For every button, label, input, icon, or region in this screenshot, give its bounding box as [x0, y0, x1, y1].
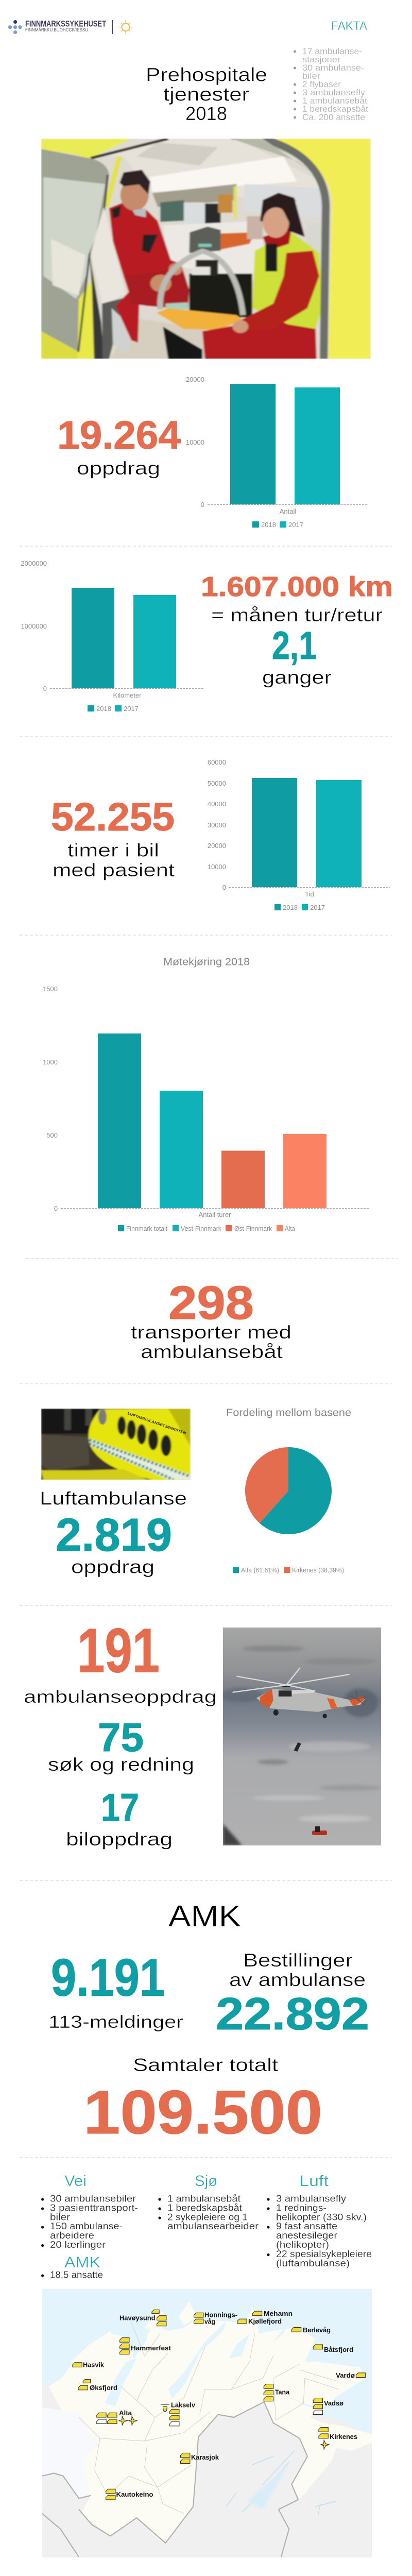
stat: 1.607.000 km: = månen tur/retur — [211, 604, 383, 625]
panel: AMK staff: 18,5 ansatte — [50, 2270, 103, 2280]
panel: Luft: 1 rednings- — [276, 2203, 327, 2213]
bar chart: møtekjøring: Antall turer — [199, 1211, 231, 1218]
pie chart: fordeling — [233, 1447, 344, 1574]
stat: 298 transporter: 298 — [168, 1277, 254, 1329]
stat: 191 ambulanseoppdrag: ambulanseoppdrag — [24, 1687, 217, 1707]
panel: Vei: 30 ambulansebiler — [50, 2194, 136, 2204]
bar chart: møtekjøring: Alta — [285, 1225, 296, 1232]
logo: FINNMARKSSYKEHUSET — [25, 19, 106, 28]
bar chart: tid: 60000 — [208, 758, 226, 766]
heading: Fordeling mellom basene: Fordeling mellom basene — [226, 1408, 351, 1419]
logo: FINNMÁRKKU BUOHCCIVIESSU — [25, 27, 88, 33]
map labels: Vadsø — [324, 2399, 344, 2407]
panel: Vei: arbeidere — [50, 2230, 94, 2241]
panel: Luft: (helikopter) — [276, 2240, 329, 2250]
stat: samtaler totalt: 109.500 — [83, 2078, 322, 2147]
map labels: Honnings- — [204, 2311, 237, 2318]
panel: Luft: (luftambulanse) — [276, 2258, 350, 2268]
map labels: Hammerfest — [131, 2344, 171, 2352]
fact list: 30 ambulanse- — [302, 63, 364, 73]
bar chart: oppdrag: 10000 — [186, 438, 204, 446]
stat: bestillinger av ambulanse: av ambulanse — [229, 1969, 366, 1990]
bar chart: kilometer: 1000000 — [21, 622, 47, 630]
stat: 52.255 timer — [51, 795, 175, 880]
bar chart: tid: 2017 — [310, 904, 325, 911]
stat: 19.264 oppdrag — [57, 413, 181, 479]
stat: 17 biloppdrag: biloppdrag — [66, 1828, 173, 1850]
photo: paramedics in ambulance — [41, 139, 371, 360]
stat: 1.607.000 km — [201, 571, 393, 688]
fact list — [294, 46, 368, 122]
bar chart: møtekjøring: 0 — [54, 1205, 58, 1212]
fact list: 3 ambulansefly — [302, 88, 366, 97]
panel: Sjø: 2 sykepleiere og 1 — [167, 2212, 248, 2222]
stat: 113-meldinger: 113-meldinger — [48, 2012, 183, 2032]
map labels: Øksfjord — [90, 2384, 117, 2392]
map: stations in Finnmark — [42, 2289, 372, 2557]
heading: AMK: AMK — [168, 1900, 241, 1933]
stat: 298 transporter: ambulansebåt — [141, 1341, 283, 1362]
bar chart: tid: 30000 — [208, 821, 226, 829]
heading: Møtekjøring 2018: Møtekjøring 2018 — [163, 956, 250, 968]
fact list: 1 ambulansebåt — [302, 96, 367, 106]
bar chart: møtekjøring: 1000 — [43, 1058, 58, 1066]
panel: Luft: anestesileger — [276, 2230, 337, 2241]
panel: Vei: 3 pasienttransport- — [50, 2203, 138, 2213]
panel: Sjø — [158, 2173, 259, 2231]
stat: 52.255 timer: timer i bil — [67, 840, 159, 860]
bar chart: tid: 0 — [222, 884, 226, 891]
fact list: 17 ambulanse- — [302, 46, 362, 56]
panel: Luft: 22 spesialsykepleiere — [276, 2249, 372, 2259]
panel: Vei: 20 lærlinger — [50, 2240, 106, 2250]
title: tjenester — [163, 83, 249, 105]
photo: ambulance plane — [41, 1409, 191, 1481]
stat: 75 søk og redning: 75 — [98, 1715, 144, 1760]
photo: ambulance plane: LUFTAMBULANSETJENESTEN — [127, 1412, 186, 1435]
fact list: 2 flybaser — [302, 79, 341, 89]
map labels: Hasvik — [83, 2361, 105, 2369]
fact list: Ca. 200 ansatte — [302, 112, 365, 122]
panel: AMK staff — [41, 2254, 103, 2280]
panel: Luft: Luft — [299, 2173, 329, 2190]
stat: bestillinger av ambulanse — [216, 1950, 369, 2039]
stat: 1.607.000 km: ganger — [262, 667, 332, 688]
title — [146, 64, 267, 124]
bar chart: tid — [208, 758, 390, 911]
bar chart: tid: 50000 — [208, 779, 226, 787]
stat: 191 ambulanseoppdrag — [24, 1616, 217, 1707]
pie chart: fordeling: Kirkenes (38.39%) — [292, 1566, 344, 1574]
map labels: Mehamn — [264, 2310, 293, 2317]
logo — [8, 19, 132, 34]
bar chart: tid: 40000 — [208, 800, 226, 808]
stat: samtaler totalt: Samtaler totalt — [133, 2055, 278, 2075]
panel: Luft: 9 fast ansatte — [276, 2221, 337, 2231]
stat: 17 biloppdrag: 17 — [101, 1786, 139, 1829]
stat: 113-meldinger: 9.191 — [51, 1948, 165, 2007]
map labels: Tana — [275, 2388, 290, 2396]
map labels: Kautokeino — [116, 2490, 153, 2498]
stat: 17 biloppdrag — [66, 1786, 173, 1850]
map labels: Kirkenes — [330, 2433, 357, 2441]
stat: 19.264 oppdrag: 19.264 — [57, 413, 181, 457]
bar chart: møtekjøring: 1500 — [43, 985, 58, 993]
bar chart: tid: 2018 — [283, 904, 298, 911]
bar chart: møtekjøring: Vest-Finnmark — [181, 1225, 221, 1232]
panel: Sjø: 1 beredskapsbåt — [167, 2203, 242, 2213]
panel: Vei: biler — [50, 2212, 70, 2222]
panel: Luft — [267, 2173, 372, 2268]
stat: luftambulanse — [40, 1488, 187, 1578]
pie chart: fordeling: Alta (61.61%) — [241, 1566, 279, 1574]
bar chart: oppdrag: 2017 — [288, 521, 303, 529]
stat: 75 søk og redning — [48, 1715, 194, 1775]
map labels: Berlevåg — [303, 2326, 331, 2334]
bar chart: møtekjøring: 500 — [46, 1131, 58, 1139]
bar chart: kilometer: 2000000 — [21, 560, 47, 567]
title: 2018 — [185, 103, 227, 124]
bar chart: tid: Tid — [305, 890, 314, 898]
panel: Luft: 3 ambulansefly — [276, 2194, 346, 2204]
panel: Sjø: ambulansearbeider — [167, 2221, 259, 2231]
bar chart: møtekjøring: Øst-Finnmark — [234, 1225, 272, 1232]
stat: 298 transporter: transporter med — [131, 1321, 291, 1343]
panel: Sjø: Sjø — [195, 2173, 217, 2190]
bar chart: oppdrag: 20000 — [186, 376, 204, 383]
title: Prehospitale — [146, 64, 267, 86]
bar chart: oppdrag — [186, 376, 368, 529]
map labels: Karasjok — [191, 2453, 219, 2461]
fact list: biler — [302, 71, 320, 81]
heading: FAKTA: FAKTA — [331, 19, 367, 33]
bar chart: kilometer: 0 — [43, 685, 47, 692]
stat: 191 ambulanseoppdrag: 191 — [77, 1616, 160, 1686]
map labels: Kjøllefjord — [248, 2317, 282, 2325]
stat: luftambulanse: 2.819 — [56, 1510, 172, 1561]
stat: 52.255 timer: med pasient — [53, 859, 175, 880]
bar chart: oppdrag: 0 — [201, 501, 204, 509]
map labels: Havøysund — [119, 2314, 156, 2321]
stat: 298 transporter — [131, 1277, 291, 1362]
map labels: Lakselv — [171, 2401, 196, 2409]
fact list: stasjoner — [302, 55, 340, 64]
stat: 75 søk og redning: søk og redning — [48, 1754, 194, 1775]
bar chart: kilometer: 2018 — [96, 705, 111, 713]
map labels: våg — [204, 2317, 215, 2325]
map labels: Alta — [119, 2409, 132, 2417]
panel: AMK staff: AMK — [64, 2254, 100, 2271]
stat: 113-meldinger — [48, 1948, 183, 2032]
map labels: Båtsfjord — [324, 2346, 353, 2353]
panel: Vei: 150 ambulanse- — [50, 2221, 123, 2231]
bar chart: kilometer: Kilometer — [113, 691, 142, 699]
map labels — [83, 2310, 357, 2498]
bar chart: møtekjøring — [43, 985, 369, 1232]
panel: Vei: Vei — [64, 2173, 87, 2190]
panel: Vei — [41, 2173, 138, 2250]
stat: 19.264 oppdrag: oppdrag — [77, 457, 160, 479]
bar chart: kilometer: 2017 — [124, 705, 139, 713]
panel: Luft: helikopter (330 skv.) — [276, 2212, 367, 2222]
stat: bestillinger av ambulanse: 22.892 — [216, 1988, 369, 2039]
stat: 1.607.000 km: 1.607.000 km — [201, 571, 393, 602]
bar chart: tid: 20000 — [208, 842, 226, 850]
stat: 1.607.000 km: 2,1 — [272, 624, 317, 668]
stat: bestillinger av ambulanse: Bestillinger — [243, 1950, 353, 1971]
stat: luftambulanse: Luftambulanse — [40, 1488, 187, 1509]
bar chart: kilometer — [21, 560, 203, 713]
bar chart: tid: 10000 — [208, 863, 226, 871]
photo: rescue helicopter — [221, 1628, 381, 1845]
fact list: 1 beredskapsbåt — [302, 104, 368, 114]
bar chart: oppdrag: Antall — [280, 507, 296, 515]
panel: Sjø: 1 ambulansebåt — [167, 2194, 241, 2204]
stat: luftambulanse: oppdrag — [71, 1556, 154, 1578]
stat: 52.255 timer: 52.255 — [51, 795, 175, 839]
map labels: Vardø — [336, 2371, 355, 2379]
bar chart: møtekjøring: Finnmark totalt — [126, 1225, 167, 1232]
bar chart: oppdrag: 2018 — [261, 521, 276, 529]
